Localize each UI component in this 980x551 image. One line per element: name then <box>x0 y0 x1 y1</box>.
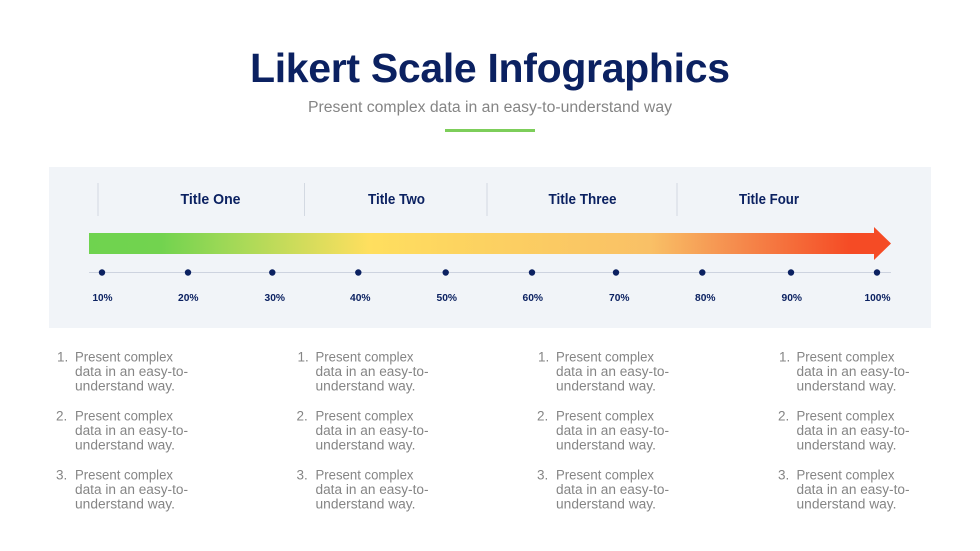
percent labels: 100% <box>864 292 891 304</box>
text block: column three list: Present complex <box>556 468 654 482</box>
text block: column three list: understand way. <box>556 378 656 394</box>
text block: column two list: Present complex <box>316 408 414 424</box>
text block: column four list <box>778 350 910 512</box>
text block: column four list: Present complex <box>796 350 895 364</box>
text block: column three list: data in an easy-to- <box>556 423 669 438</box>
text block: column three list: understand way. <box>556 496 656 512</box>
text block: column three list: Present complex <box>556 408 654 424</box>
column dividers <box>98 183 678 216</box>
text block: column one list: understand way. <box>75 378 175 394</box>
text block: column four list: 2. <box>778 408 789 424</box>
text block: column three list: data in an easy-to- <box>556 482 669 497</box>
text block: column two list: understand way. <box>316 496 416 512</box>
heading: Title Three: Title Three <box>548 191 616 208</box>
text block: column one list: Present complex <box>75 408 173 424</box>
text block: column two list: data in an easy-to- <box>316 423 428 438</box>
text block: column two list: Present complex <box>316 468 414 482</box>
text block: column three list: 1. <box>538 350 549 364</box>
text block: column two list <box>296 350 428 512</box>
percent labels: 20% <box>178 292 199 304</box>
heading: Title One: Title One <box>180 191 240 208</box>
text block: column four list: Present complex <box>796 468 895 482</box>
text block: column one list: 3. <box>56 468 67 482</box>
scale axis with dots <box>89 269 891 276</box>
gradient arrow <box>89 227 891 260</box>
text block: column one list: Present complex <box>75 468 173 482</box>
title: Likert Scale Infographics <box>250 45 730 91</box>
text block: column two list: Present complex <box>316 350 414 364</box>
text block: column four list: data in an easy-to- <box>796 423 910 438</box>
text block: column one list: 1. <box>57 350 68 364</box>
text block: column three list: Present complex <box>556 350 654 364</box>
green accent rule <box>445 129 535 132</box>
percent labels: 90% <box>782 292 803 304</box>
text block: column one list: Present complex <box>75 350 173 364</box>
percent labels: 50% <box>436 292 458 304</box>
text block: column one list <box>56 350 188 512</box>
text block: column one list: 2. <box>56 408 67 424</box>
percent labels: 40% <box>350 292 371 304</box>
text block: column one list: data in an easy-to- <box>75 364 188 379</box>
text block: column one list: data in an easy-to- <box>75 482 188 497</box>
percent labels: 80% <box>695 292 716 304</box>
text block: column one list: understand way. <box>75 438 175 452</box>
text block: column two list: understand way. <box>316 378 416 394</box>
text block: column two list: 2. <box>296 408 308 424</box>
text block: column four list: data in an easy-to- <box>796 364 910 379</box>
text block: column two list: 1. <box>298 350 309 364</box>
panel: likert scale <box>49 167 931 328</box>
text block: column one list: data in an easy-to- <box>75 423 188 438</box>
text block: column four list: Present complex <box>796 408 895 424</box>
heading: Title Four: Title Four <box>739 191 799 208</box>
percent labels: 10% <box>92 292 113 304</box>
text block: column one list: understand way. <box>75 496 175 512</box>
text block: column four list: understand way. <box>796 496 896 512</box>
percent labels <box>92 292 891 304</box>
text block: column four list: 3. <box>778 468 789 482</box>
text block: column three list: data in an easy-to- <box>556 364 669 379</box>
text block: column two list: understand way. <box>316 438 416 452</box>
text block: column three list <box>537 350 669 512</box>
text block: column four list: data in an easy-to- <box>796 482 910 497</box>
text block: column three list: understand way. <box>556 438 656 452</box>
text block: column three list: 2. <box>537 408 548 424</box>
heading: Title Two: Title Two <box>368 191 425 208</box>
text block: column two list: 3. <box>296 468 308 482</box>
text block: column four list: understand way. <box>796 378 896 394</box>
subtitle: Present complex data in an easy-to-understand way <box>308 99 672 116</box>
text block: column four list: understand way. <box>796 438 896 452</box>
text block: column two list: data in an easy-to- <box>316 482 428 497</box>
percent labels: 60% <box>522 292 544 304</box>
percent labels: 30% <box>264 292 286 304</box>
text block: column three list: 3. <box>537 468 548 482</box>
percent labels: 70% <box>609 292 630 304</box>
text block: column two list: data in an easy-to- <box>316 364 428 379</box>
text block: column four list: 1. <box>779 350 790 364</box>
